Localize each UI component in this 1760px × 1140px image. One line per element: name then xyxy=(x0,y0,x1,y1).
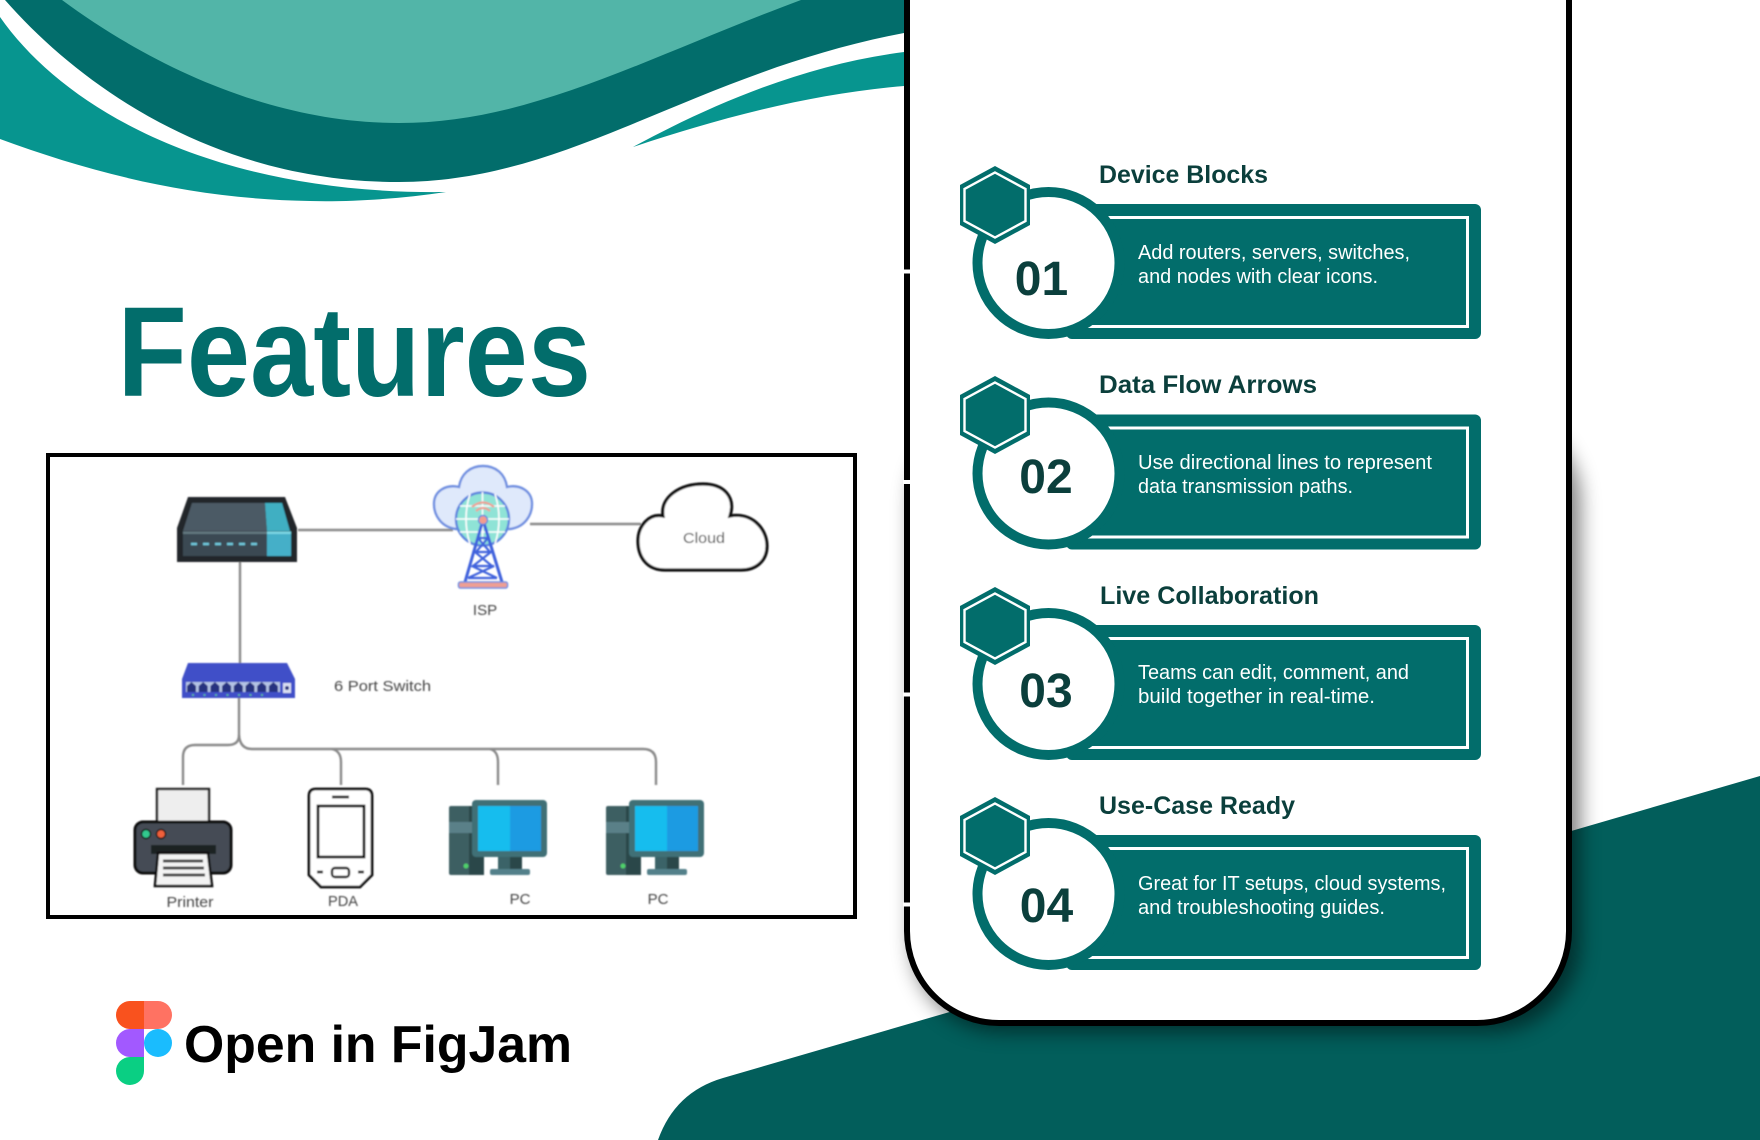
icon: PDA xyxy=(309,789,372,887)
description xyxy=(1138,662,1409,708)
icon: 6 port switch xyxy=(182,663,295,698)
number circle xyxy=(978,402,1120,544)
phone drop shadow xyxy=(912,412,1580,1032)
icon: cloud xyxy=(638,484,767,570)
wave: light teal xyxy=(62,0,801,123)
line 2: and troubleshooting guides. xyxy=(1138,897,1385,919)
label: ISP: ISP xyxy=(473,602,497,619)
label: PC 1: PC xyxy=(510,891,531,908)
card background xyxy=(1066,835,1481,970)
heading: Data Flow Arrows xyxy=(1099,371,1317,399)
label: Cloud: Cloud xyxy=(683,530,725,547)
top wave decoration xyxy=(0,0,904,201)
diagram frame xyxy=(48,455,855,917)
feature 02: Data Flow Arrows xyxy=(960,371,1481,550)
router LEDs xyxy=(191,543,257,545)
hexagon badge xyxy=(960,166,1030,244)
ISP globe xyxy=(456,492,509,546)
wave: teal right sliver xyxy=(633,52,904,147)
line 2: and nodes with clear icons. xyxy=(1138,266,1378,288)
icon: printer xyxy=(135,789,231,886)
feature 01: Device Blocks xyxy=(960,161,1481,339)
card background xyxy=(1066,625,1481,760)
card background xyxy=(1066,414,1481,550)
heading: Device Blocks xyxy=(1099,161,1268,189)
network diagram content xyxy=(135,466,767,911)
number circle xyxy=(978,613,1120,755)
heading: Live Collaboration xyxy=(1100,582,1319,610)
line 1: Great for IT setups, cloud systems, xyxy=(1138,873,1446,895)
wave: teal left sliver xyxy=(0,17,446,201)
number 04: 04 xyxy=(1020,880,1074,933)
connector lines xyxy=(183,524,656,785)
ISP tower lattice xyxy=(468,538,497,578)
panel: network diagram xyxy=(48,455,855,917)
heading: Use-Case Ready xyxy=(1099,792,1295,820)
panel: phone frame xyxy=(903,0,1569,1023)
line 2: data transmission paths. xyxy=(1138,476,1353,498)
description xyxy=(1138,242,1410,288)
hexagon badge xyxy=(960,587,1030,665)
number 02: 02 xyxy=(1019,451,1073,504)
feature 04: Use-Case Ready xyxy=(960,792,1481,970)
card inner outline xyxy=(1050,218,1468,326)
number 01: 01 xyxy=(1015,253,1068,306)
wave: dark teal band xyxy=(5,0,904,182)
feature 03: Live Collaboration xyxy=(960,582,1481,760)
hexagon badge xyxy=(960,797,1030,875)
card inner outline xyxy=(1050,638,1468,748)
label: 6 Port Switch: 6 Port Switch xyxy=(334,678,431,695)
bottom-right dark teal background shape xyxy=(658,776,1760,1140)
label: PC 2: PC xyxy=(648,891,669,908)
card inner outline xyxy=(1050,848,1468,958)
card background xyxy=(1066,204,1481,339)
label: PDA: PDA xyxy=(328,893,358,910)
phone body xyxy=(907,0,1569,1023)
title: Features: Features xyxy=(118,281,591,424)
ISP tower right leg xyxy=(483,520,502,582)
ISP tower mast xyxy=(465,520,483,582)
ISP cloud xyxy=(434,466,532,529)
number circle xyxy=(978,192,1120,334)
phone side buttons xyxy=(903,272,911,904)
line 1: Teams can edit, comment, and xyxy=(1138,662,1409,684)
call to action text: Open in FigJam xyxy=(184,1016,572,1074)
number circle xyxy=(978,823,1120,965)
icon: PC 1 xyxy=(449,800,547,875)
label: Printer: Printer xyxy=(166,894,214,911)
Open in FigJam call to action xyxy=(116,1001,572,1085)
icon: PC 2 xyxy=(606,800,704,875)
description xyxy=(1138,452,1432,498)
line 1: Add routers, servers, switches, xyxy=(1138,242,1410,264)
icon: ISP tower xyxy=(434,466,532,588)
card inner outline xyxy=(1050,428,1468,537)
line 1: Use directional lines to represent xyxy=(1138,452,1432,474)
description xyxy=(1138,873,1446,919)
number 03: 03 xyxy=(1019,665,1073,718)
icon: Figma logo xyxy=(116,1001,172,1085)
icon: router xyxy=(177,497,297,562)
hexagon badge xyxy=(960,376,1030,454)
line 2: build together in real-time. xyxy=(1138,686,1375,708)
ISP signal xyxy=(472,502,494,511)
